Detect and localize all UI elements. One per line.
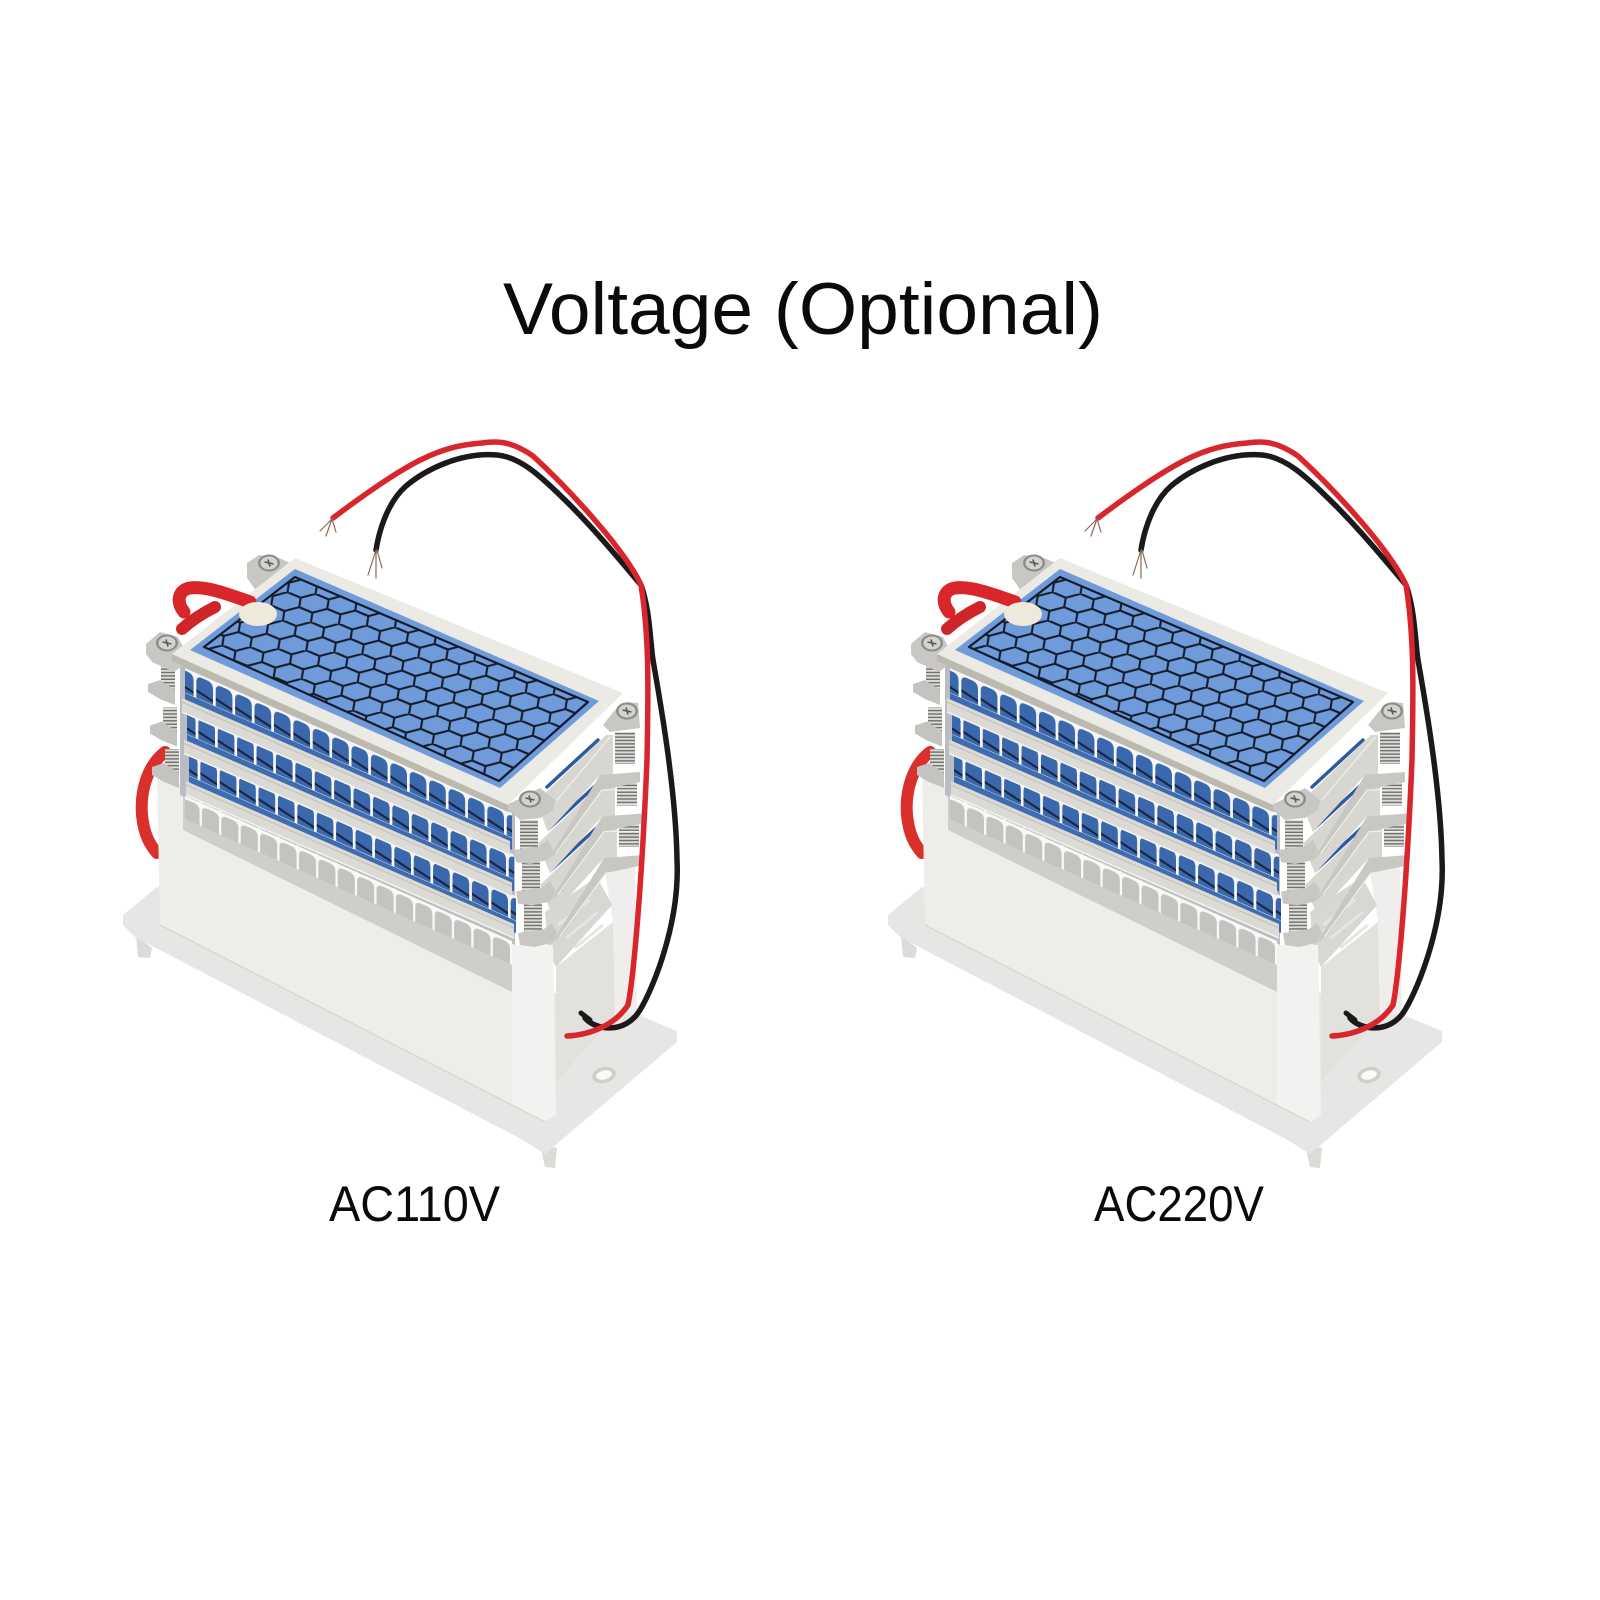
red wire on left side bbox=[142, 752, 165, 853]
lower fin slot bbox=[180, 660, 515, 992]
stacked ceramic plate tier 1 bbox=[148, 666, 640, 864]
plastic base and rear housing bbox=[888, 857, 1442, 1168]
stacked ceramic plate tier 3 bbox=[152, 749, 644, 947]
label: AC110V: AC110V bbox=[329, 1176, 501, 1232]
screw: top bbox=[1023, 554, 1045, 572]
red wire on left side bbox=[907, 752, 930, 853]
stacked ceramic plate tier 2 bbox=[915, 708, 1407, 906]
stacked ceramic plate tier 3 bbox=[917, 749, 1409, 947]
screw: left bbox=[921, 634, 943, 652]
title: Voltage (Optional) bbox=[503, 269, 1103, 350]
front housing bbox=[157, 775, 556, 1122]
product photo: AC110V ozone generator bbox=[123, 442, 677, 1168]
label: AC220V: AC220V bbox=[1094, 1176, 1265, 1232]
glue blob bbox=[239, 602, 277, 626]
red silicone wire loop bbox=[179, 588, 250, 629]
glue blob bbox=[1004, 602, 1042, 626]
red silicone wire loop bbox=[944, 588, 1015, 629]
plastic base and rear housing bbox=[123, 857, 677, 1168]
screw: right bbox=[616, 702, 638, 720]
top ceramic plate with blue hexagon mesh bbox=[911, 555, 1405, 820]
stacked ceramic plate tier 2 bbox=[150, 708, 642, 906]
screw: left bbox=[156, 634, 178, 652]
screw: front bbox=[519, 790, 541, 808]
top ceramic plate with blue hexagon mesh bbox=[146, 555, 640, 820]
red and black lead wires bbox=[1085, 442, 1442, 1036]
screw: top bbox=[258, 554, 280, 572]
red and black lead wires bbox=[320, 442, 677, 1036]
lower fin slot bbox=[945, 660, 1280, 992]
product photo: AC220V ozone generator bbox=[888, 442, 1442, 1168]
stacked ceramic plate tier 1 bbox=[913, 666, 1405, 864]
screw: right bbox=[1381, 702, 1403, 720]
screw: front bbox=[1284, 790, 1306, 808]
front housing bbox=[922, 775, 1321, 1122]
